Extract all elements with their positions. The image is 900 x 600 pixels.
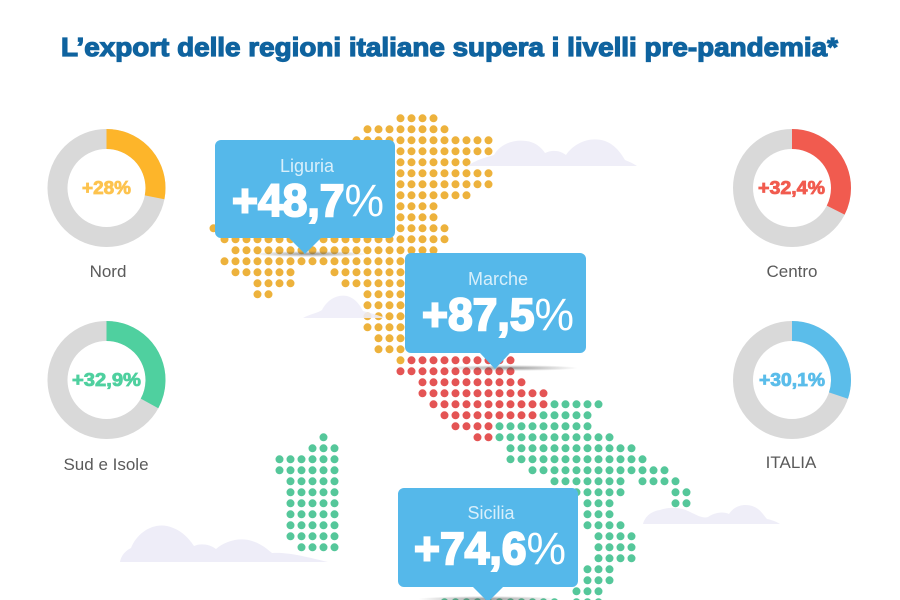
- donut: ITALIA: +30,1%: [759, 370, 825, 390]
- donut: Nord: +28%: [82, 178, 131, 198]
- map: sardinia dots: [280, 437, 335, 547]
- cloud: bottom left: [120, 525, 328, 562]
- donut: Centro: +32,4%: [758, 178, 825, 198]
- donut: ITALIA: [743, 331, 841, 472]
- donut: Sud e Isole: +32,9%: [72, 370, 141, 390]
- callout: Marche: +87,5%: [422, 289, 574, 340]
- donut: Centro: [743, 139, 841, 281]
- title: L’export delle regioni italiane supera i livelli pre-pandemia*: [61, 32, 839, 62]
- donut: Centro: Centro: [766, 262, 818, 281]
- donut: Nord: [58, 139, 156, 281]
- cloud: bottom right: [643, 505, 780, 524]
- donut: Sud e Isole: Sud e Isole: [63, 455, 149, 474]
- donut: Sud e Isole: [58, 331, 156, 474]
- callout: Sicilia: [398, 488, 578, 600]
- callout: Marche: [405, 253, 586, 371]
- map: centre dots: [400, 360, 544, 437]
- donut: Nord: Nord: [90, 262, 126, 281]
- cloud: top right: [467, 139, 637, 166]
- cloud: centre: [303, 296, 385, 318]
- callout: Liguria: [215, 140, 395, 257]
- callout: Sicilia: +74,6%: [414, 523, 566, 574]
- map: south dots: [444, 404, 687, 600]
- callout: Liguria: +48,7%: [232, 175, 384, 226]
- map: north dots: [214, 118, 489, 360]
- callout: Sicilia: Sicilia: [467, 503, 515, 523]
- donut: ITALIA: ITALIA: [766, 453, 817, 472]
- callout: Liguria: Liguria: [280, 156, 335, 176]
- callout: Marche: Marche: [468, 269, 528, 289]
